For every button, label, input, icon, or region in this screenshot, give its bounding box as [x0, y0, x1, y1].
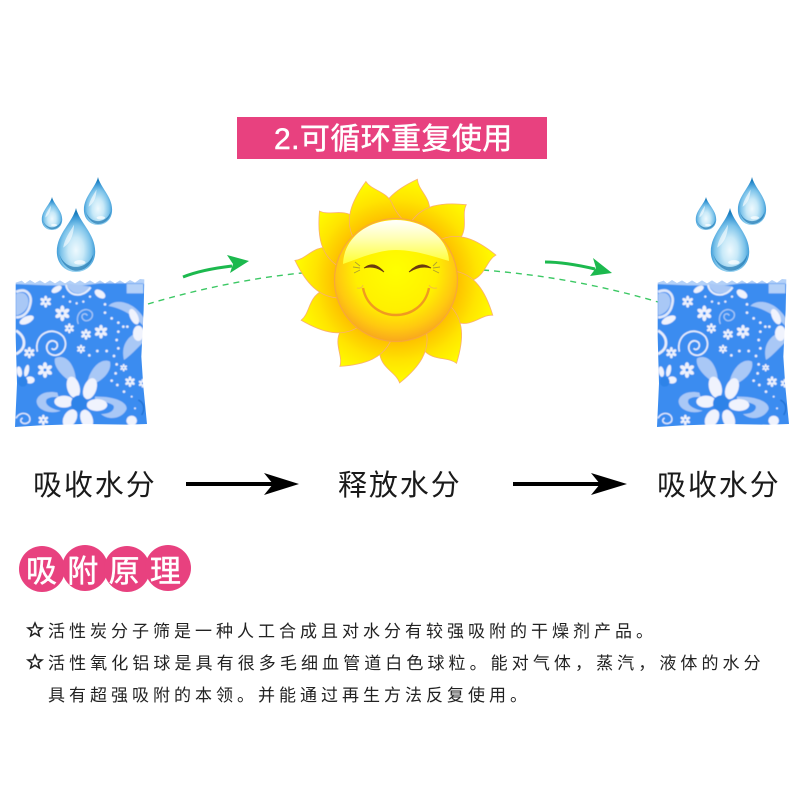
desiccant bag: left: [10, 277, 150, 430]
desiccant bag: right: [652, 277, 792, 430]
label: absorb moisture right: 吸收水分: [657, 469, 781, 502]
dashed path: bag to sun: [148, 273, 302, 304]
icon: star bullet 1: [28, 623, 42, 636]
icon: star bullet 2: [28, 655, 42, 668]
green arrow: right: [545, 258, 612, 276]
text: bullet 1: 活性炭分子筛是一种人工合成且对水分有较强吸附的干燥剂产品。: [48, 622, 657, 641]
icon: smiling sun: [289, 173, 503, 384]
water drops: left: [42, 177, 112, 272]
black arrow: second: [513, 473, 627, 495]
text: bullet 2: [48, 654, 765, 705]
title banner: 2.可循环重复使用: [274, 123, 513, 156]
title banner: [237, 117, 547, 159]
text: bullet 2: 活性氧化铝球是具有很多毛细血管道白色球粒。能对气体，蒸汽，液体的水分: [48, 654, 765, 673]
section heading: adsorption principle: 吸附原理: [26, 554, 191, 589]
green arrow: left: [183, 255, 249, 277]
water drops: right: [696, 177, 766, 272]
label: release moisture: 释放水分: [338, 469, 462, 502]
black arrow: first: [186, 473, 299, 495]
text: bullet 2: 具有超强吸附的本领。并能通过再生方法反复使用。: [48, 685, 531, 705]
label: absorb moisture left: 吸收水分: [33, 469, 157, 502]
dashed path: sun to bag: [483, 270, 658, 302]
